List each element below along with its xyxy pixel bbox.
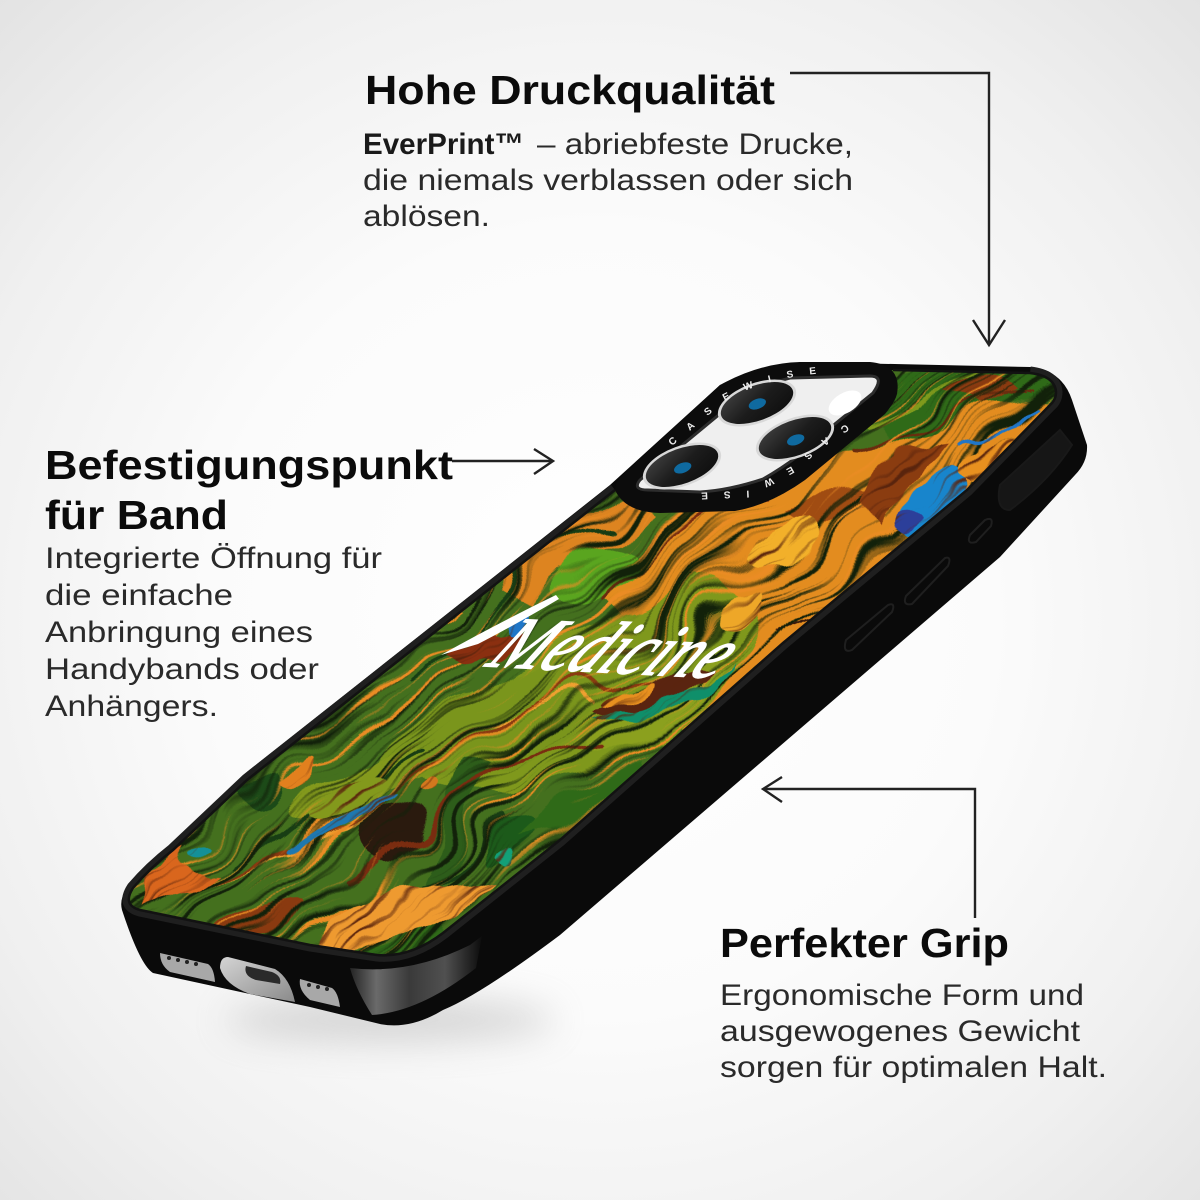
heading: Hohe Druckqualität bbox=[365, 67, 775, 113]
marbled print bbox=[130, 370, 1055, 954]
right speaker bbox=[300, 979, 340, 1007]
camera window bbox=[637, 376, 878, 492]
script wordmark: Medicine: Medicine bbox=[472, 602, 762, 694]
body: – abriebfeste Drucke, bbox=[537, 128, 853, 161]
body: Handybands oder bbox=[45, 653, 319, 686]
body bbox=[363, 128, 853, 233]
side bezel bbox=[129, 373, 1056, 955]
flash bbox=[824, 385, 866, 421]
arrow: print quality bbox=[790, 73, 1005, 345]
heading bbox=[45, 442, 453, 538]
marble accent blobs bbox=[141, 410, 1041, 950]
body: Ergonomische Form und bbox=[720, 979, 1084, 1012]
body: Anbringung eines bbox=[45, 616, 313, 649]
camera ring bbox=[615, 362, 898, 513]
camera island: CASEWISE bbox=[702, 425, 848, 500]
lens right bbox=[750, 405, 840, 471]
body: ablösen. bbox=[363, 200, 490, 233]
charging port bbox=[220, 957, 295, 1002]
body: sorgen für optimalen Halt. bbox=[720, 1051, 1107, 1084]
left speaker bbox=[160, 953, 215, 982]
body: EverPrint™ bbox=[363, 128, 524, 161]
charging port and speakers bbox=[160, 953, 340, 1007]
lens left bbox=[637, 433, 727, 499]
side buttons bbox=[845, 430, 1072, 651]
ring lettering: CASEWISE bbox=[669, 367, 816, 444]
body: die einfache bbox=[45, 579, 233, 612]
body: die niemals verblassen oder sich bbox=[363, 164, 853, 197]
heading: Befestigungspunkt bbox=[45, 442, 453, 488]
phone shadow bbox=[225, 998, 555, 1042]
heading: für Band bbox=[45, 492, 228, 538]
body: Anhängers. bbox=[45, 690, 218, 723]
case body silhouette bbox=[121, 362, 1087, 1025]
body: ausgewogenes Gewicht bbox=[720, 1015, 1081, 1048]
text block: strap attachment bbox=[45, 442, 453, 723]
glossy bottom corner bbox=[350, 936, 482, 1015]
body: Integrierte Öffnung für bbox=[45, 542, 382, 575]
camera island bbox=[615, 362, 898, 513]
marble base layer bbox=[130, 370, 1055, 954]
print rim bbox=[129, 370, 1056, 955]
arrow: grip bbox=[763, 777, 975, 918]
body bbox=[45, 542, 382, 723]
text block: grip bbox=[720, 920, 1107, 1084]
text block: print quality bbox=[363, 67, 853, 233]
lens top bbox=[712, 370, 802, 436]
arrow: strap attachment bbox=[452, 449, 553, 474]
body bbox=[720, 979, 1107, 1084]
heading: Perfekter Grip bbox=[720, 920, 1009, 966]
